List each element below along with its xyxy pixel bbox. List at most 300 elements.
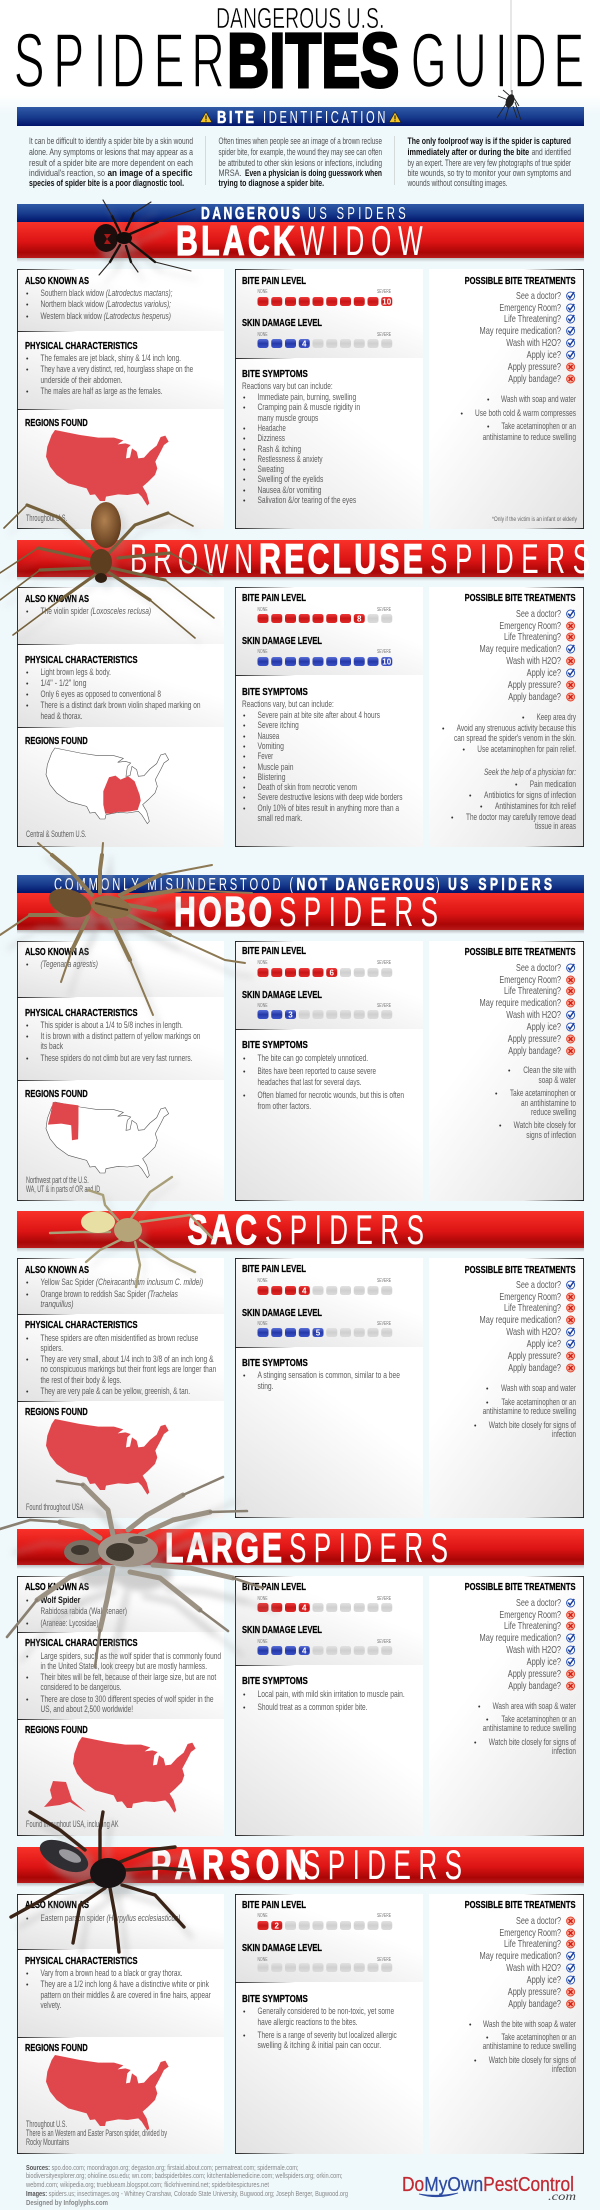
text block: intro column 3: wounds without consulting images.	[407, 178, 508, 188]
panel: large spiders levels and symptoms: BITE PAIN LEVEL	[242, 1581, 306, 1593]
panel: brown recluse levels and symptoms: Severe destructive lesions with deep wide borders	[258, 792, 403, 803]
panel: hobo levels and symptoms: NONE	[258, 1003, 268, 1009]
panel: sac identification: ALSO KNOWN AS	[25, 1264, 89, 1276]
panel: brown recluse levels and symptoms: •	[243, 806, 246, 813]
panel: brown recluse identification: 1/4" - 1/2" long	[40, 678, 86, 689]
panel: parson levels and symptoms: SKIN DAMAGE LEVEL	[242, 1942, 322, 1954]
panel: hobo treatments: soap & water	[538, 1075, 576, 1086]
panel: black widow identification: The females are jet black, shiny & 1/4 inch long.	[40, 353, 181, 364]
panel: hobo identification: It is brown with a distinct pattern of yellow markings on	[40, 1031, 200, 1042]
panel: parson treatments: See a doctor?	[516, 1915, 561, 1927]
panel: hobo treatments: Clean the site with	[523, 1065, 576, 1076]
panel: parson levels and symptoms: BITE PAIN LEVEL	[242, 1899, 306, 1911]
panel: black widow treatments: •	[487, 424, 490, 431]
panel: large spiders levels and symptoms: SKIN DAMAGE LEVEL	[242, 1624, 322, 1636]
panel: brown recluse levels and symptoms: Severe itching	[258, 720, 299, 731]
panel: black widow levels and symptoms: Immediate pain, burning, swelling	[258, 392, 356, 403]
panel: brown recluse treatments: tissue in areas	[535, 821, 576, 832]
panel: black widow identification	[17, 269, 224, 529]
band: hobo spiders: SPIDERS	[279, 889, 445, 936]
panel: sac identification: Found throughout USA	[26, 1502, 84, 1513]
panel: black widow treatments: Apply pressure?	[508, 361, 561, 373]
panel: sac treatments: Life Threatening?	[504, 1302, 561, 1314]
band: large spiders: LARGE	[165, 1524, 285, 1571]
panel: brown recluse identification: •	[26, 609, 29, 616]
panel: brown recluse treatments: Pain medication	[530, 779, 576, 790]
panel: brown recluse levels and symptoms: Fever	[258, 751, 273, 762]
panel: large spiders identification: •	[26, 1675, 29, 1682]
panel: parson levels and symptoms: swelling & itching & initial pain can occur.	[258, 2040, 381, 2051]
panel: black widow identification: PHYSICAL CHARACTERISTICS	[25, 340, 138, 352]
panel: sac treatments: •	[474, 1423, 477, 1430]
panel: hobo levels and symptoms: NONE	[258, 960, 268, 966]
panel: hobo levels and symptoms: •	[243, 1056, 246, 1063]
panel: sac levels and symptoms: SEVERE	[377, 1321, 391, 1327]
panel: parson identification: •	[26, 1916, 29, 1923]
footer: sources: Designed by Infoglyphs.com	[26, 2198, 108, 2207]
panel: sac levels and symptoms: NONE	[258, 1278, 268, 1284]
panel: black widow treatments: Apply bandage?	[508, 373, 561, 385]
panel: black widow levels and symptoms: Swelling of the eyelids	[258, 474, 323, 485]
panel: sac identification: •	[26, 1357, 29, 1364]
panel: brown recluse identification: Central & Southern U.S.	[26, 829, 86, 840]
panel: black widow treatments: Life Threatening?	[504, 313, 561, 325]
panel: brown recluse treatments: •	[469, 793, 472, 800]
panel: large spiders identification: Wolf Spider	[40, 1595, 81, 1605]
panel: parson levels and symptoms: BITE SYMPTOMS	[242, 1993, 308, 2005]
panel: large spiders treatments: •	[486, 1717, 489, 1724]
panel: black widow treatments: See a doctor?	[516, 290, 561, 302]
panel: large spiders treatments: Apply pressure?	[508, 1668, 561, 1680]
panel: large spiders identification: Rabidosa rabida (Walckenaer)	[40, 1606, 127, 1617]
panel: sac treatments: Apply pressure?	[508, 1350, 561, 1362]
panel: hobo treatments: •	[495, 1091, 498, 1098]
panel: parson levels and symptoms: 2	[275, 1922, 280, 1930]
panel: sac levels and symptoms: SKIN DAMAGE LEVEL	[242, 1307, 322, 1319]
panel: sac identification	[17, 1258, 224, 1518]
panel: black widow treatments: Wash with H2O?	[506, 337, 561, 349]
panel: black widow identification: The males are half as large as the females.	[40, 386, 162, 397]
panel: sac levels and symptoms: 5	[316, 1328, 321, 1338]
panel: sac levels and symptoms: BITE SYMPTOMS	[242, 1357, 308, 1369]
panel: large spiders levels and symptoms: NONE	[258, 1639, 268, 1645]
panel: hobo identification: REGIONS FOUND	[25, 1088, 88, 1100]
panel: brown recluse levels and symptoms: SEVERE	[377, 649, 391, 655]
panel: brown recluse identification: ALSO KNOWN AS	[25, 593, 89, 605]
panel: parson identification: They are a 1/2 inch long & have a distinctive white or pink	[40, 1979, 209, 1990]
band: hobo spiders: HOBO	[174, 888, 274, 935]
panel: black widow identification: •	[26, 314, 29, 321]
panel: hobo identification: Northwest part of the U.S.	[26, 1175, 89, 1186]
panel: sac identification: Yellow Sac Spider (Cheiracanthium inclusum C. mildei)	[40, 1277, 203, 1288]
panel: large spiders identification: •	[26, 1598, 29, 1605]
panel: black widow identification: underside of their abdomen.	[40, 375, 122, 386]
title: GUIDE	[411, 19, 584, 104]
panel: sac treatments: •	[486, 1386, 489, 1393]
panel: brown recluse levels and symptoms: BITE PAIN LEVEL	[242, 592, 306, 604]
panel: parson levels and symptoms: •	[243, 2009, 246, 2016]
panel: black widow levels and symptoms: NONE	[258, 289, 268, 295]
title: BITES	[227, 18, 399, 104]
panel: hobo treatments: See a doctor?	[516, 962, 561, 974]
panel: black widow levels and symptoms: SEVERE	[377, 289, 391, 295]
band: black widow	[17, 203, 584, 265]
panel: parson levels and symptoms: Generally considered to be non-toxic, yet some	[258, 2006, 394, 2017]
panel: sac levels and symptoms: BITE PAIN LEVEL	[242, 1263, 306, 1275]
panel: brown recluse identification: PHYSICAL CHARACTERISTICS	[25, 654, 138, 666]
panel: large spiders treatments: Apply ice?	[527, 1656, 561, 1668]
panel: black widow levels and symptoms: •	[243, 477, 246, 484]
panel: hobo levels and symptoms: The bite can go completely unnoticed.	[258, 1053, 368, 1064]
panel: large spiders identification: (Araneae: Lycosidae)	[40, 1618, 98, 1629]
panel: parson identification: Vary from a brown head to a black or gray thorax.	[40, 1968, 182, 1979]
panel: large spiders treatments: •	[478, 1704, 481, 1711]
panel: hobo levels and symptoms	[235, 941, 423, 1201]
panel: parson treatments: •	[469, 2022, 472, 2029]
panel: hobo treatments: signs of infection	[526, 1130, 576, 1141]
text block: intro column 2: be attributed to other skin lesions or infections, including	[218, 158, 382, 168]
panel: black widow levels and symptoms: 10	[382, 298, 392, 306]
panel: hobo identification: This spider is about a 1/4 to 5/8 inches in length.	[40, 1020, 183, 1031]
panel: black widow identification: •	[26, 356, 29, 363]
panel: large spiders treatments: Wash with H2O?	[506, 1644, 561, 1656]
panel: hobo treatments: Apply bandage?	[508, 1045, 561, 1057]
map: whole US	[46, 1419, 169, 1495]
panel: brown recluse levels and symptoms: Death of skin from necrotic venom	[258, 782, 357, 793]
map: northwest US	[46, 1102, 169, 1178]
icon: wolf spider	[0, 1477, 277, 1691]
panel: sac identification: Orange brown to reddish Sac Spider (Trachelas	[40, 1289, 178, 1300]
panel: black widow levels and symptoms: Reactions vary but can include:	[242, 381, 333, 392]
band: hobo spiders: NOT DANGEROUS	[296, 875, 437, 895]
panel: black widow levels and symptoms: •	[243, 395, 246, 402]
panel: brown recluse treatments: •	[515, 782, 518, 789]
text block: intro column 2: trying to diagnose a spider bite.	[218, 178, 324, 188]
panel: brown recluse identification: Light brown legs & body.	[40, 667, 111, 678]
panel: sac treatments: Apply bandage?	[508, 1362, 561, 1374]
panel: parson levels and symptoms: SEVERE	[377, 1913, 391, 1919]
panel: black widow levels and symptoms: Sweating	[258, 464, 284, 475]
panel: large spiders identification: US, and about 2,500 worldwide!	[40, 1704, 133, 1715]
text block: intro column 3: immediately after or during the bite	[408, 147, 529, 157]
panel: parson treatments: •	[474, 2058, 477, 2065]
panel: black widow treatments	[429, 269, 584, 529]
panel: sac treatments: Emergency Room?	[499, 1291, 561, 1303]
panel: brown recluse treatments: •	[522, 715, 525, 722]
panel: hobo treatments: an antihistamine to	[521, 1098, 576, 1109]
band: black widow: BLACK	[176, 217, 298, 264]
panel: parson identification: Throughout U.S.	[26, 2119, 67, 2130]
panel: brown recluse levels and symptoms: small red mark.	[258, 813, 302, 824]
panel: brown recluse treatments: •	[451, 815, 454, 822]
panel: hobo identification: PHYSICAL CHARACTERISTICS	[25, 1007, 138, 1019]
title	[14, 3, 584, 104]
panel: large spiders levels and symptoms	[235, 1576, 423, 1836]
panel: hobo levels and symptoms: 6	[330, 968, 335, 978]
panel: large spiders identification: in the United States, look creepy but are mostly harmless.	[40, 1661, 207, 1672]
panel: black widow levels and symptoms: SEVERE	[377, 332, 391, 338]
panel: large spiders levels and symptoms: Local pain, with mild skin irritation to muscle pain.	[258, 1689, 405, 1700]
icon: sac spider	[50, 1177, 217, 1292]
panel: parson levels and symptoms: •	[243, 2033, 246, 2040]
panel: black widow levels and symptoms: •	[243, 457, 246, 464]
panel: parson identification: Rocky Mountains	[26, 2137, 69, 2148]
panel: parson identification: ALSO KNOWN AS	[25, 1899, 89, 1911]
panel: black widow levels and symptoms: •	[243, 447, 246, 454]
map: whole US	[46, 430, 169, 506]
panel: hobo levels and symptoms: from other factors.	[258, 1101, 311, 1112]
panel: hobo levels and symptoms: Bites have been reported to cause severe	[258, 1066, 376, 1077]
panel: black widow levels and symptoms: •	[243, 426, 246, 433]
panel: black widow treatments: *Only if the victim is an infant or elderly	[492, 517, 577, 523]
panel: large spiders treatments: Life Threatening?	[504, 1620, 561, 1632]
icon: small hanging spider	[497, 0, 521, 120]
panel: sac treatments: May require medication?	[480, 1314, 561, 1326]
panel: hobo levels and symptoms: headaches that last for several days.	[258, 1077, 362, 1088]
panel: black widow levels and symptoms: Headache	[258, 423, 286, 434]
band: brown recluse: BROWN	[130, 536, 259, 583]
panel: large spiders identification: •	[26, 1697, 29, 1704]
panel: black widow levels and symptoms: •	[243, 436, 246, 443]
panel: brown recluse treatments: May require medication?	[480, 643, 561, 655]
panel: large spiders levels and symptoms: 4	[302, 1604, 307, 1612]
band: large spiders	[17, 1524, 584, 1572]
panel: hobo identification: These spiders do not climb but are very fast runners.	[40, 1053, 192, 1064]
icon: brown recluse spider	[0, 502, 220, 644]
panel: black widow identification: •	[26, 389, 29, 396]
panel: black widow identification: •	[26, 302, 29, 309]
panel: brown recluse levels and symptoms: •	[243, 795, 246, 802]
panel: black widow identification: Southern black widow (Latrodectus mactans);	[40, 288, 173, 299]
band: hobo spiders: )	[436, 874, 440, 895]
text block: intro column 2	[206, 136, 382, 188]
panel: brown recluse levels and symptoms: Nausea	[258, 731, 280, 742]
panel: black widow identification: Throughout U.S.	[26, 513, 67, 524]
panel: brown recluse levels and symptoms: BITE SYMPTOMS	[242, 686, 308, 698]
panel: black widow identification: •	[26, 291, 29, 298]
panel: parson levels and symptoms: There is a range of severity but localized allergic	[258, 2030, 397, 2041]
panel: large spiders levels and symptoms: Should treat as a common spider bite.	[258, 1702, 368, 1713]
band: black widow: DANGEROUS	[201, 204, 303, 224]
band: black widow: US SPIDERS	[308, 203, 409, 224]
panel: parson treatments: Life Threatening?	[504, 1938, 561, 1950]
panel: brown recluse identification: •	[26, 681, 29, 688]
panel: hobo treatments: Emergency Room?	[499, 974, 561, 986]
panel: black widow levels and symptoms	[235, 269, 423, 529]
panel: sac identification: They are very pale & can be yellow, greenish, & tan.	[40, 1386, 190, 1397]
panel: large spiders identification: •	[26, 1654, 29, 1661]
panel: hobo identification: its back	[40, 1041, 63, 1052]
title: DANGEROUS U.S.	[216, 3, 384, 35]
panel: hobo treatments: May require medication?	[480, 997, 561, 1009]
panel: large spiders levels and symptoms: •	[243, 1692, 246, 1699]
band: bite identification: BITE	[217, 108, 257, 128]
panel: sac treatments	[429, 1258, 584, 1518]
band: parson spiders	[17, 1841, 584, 1889]
panel: large spiders identification: PHYSICAL CHARACTERISTICS	[25, 1637, 138, 1649]
panel: brown recluse identification: •	[26, 670, 29, 677]
logo: DoMyOwnPestControl.com: .com	[548, 2189, 576, 2203]
text block: intro column 1: species of spider bite is a poor diagnostic tool.	[29, 178, 184, 188]
panel: black widow identification: •	[26, 367, 29, 374]
panel: black widow levels and symptoms: Nausea &/or vomiting	[258, 485, 322, 496]
panel: sac treatments: Apply ice?	[527, 1338, 561, 1350]
logo: DoMyOwnPestControl.com: DoMyOwnPestControl	[402, 2174, 574, 2196]
panel: hobo levels and symptoms: 3	[288, 1010, 293, 1020]
panel: black widow treatments: Emergency Room?	[499, 302, 561, 314]
panel: brown recluse levels and symptoms: •	[243, 785, 246, 792]
panel: sac identification: spiders.	[40, 1343, 63, 1354]
panel: parson identification: REGIONS FOUND	[25, 2042, 88, 2054]
panel: large spiders levels and symptoms: •	[243, 1705, 246, 1712]
panel: brown recluse levels and symptoms: •	[243, 754, 246, 761]
panel: black widow levels and symptoms: 4	[302, 340, 307, 348]
panel: brown recluse treatments: See a doctor?	[516, 608, 561, 620]
band: hobo spiders: COMMONLY MISUNDERSTOOD (	[54, 874, 296, 895]
panel: black widow levels and symptoms: •	[243, 405, 246, 412]
panel: large spiders treatments: Emergency Room?	[499, 1609, 561, 1621]
panel: parson treatments: Apply bandage?	[508, 1998, 561, 2010]
panel: brown recluse levels and symptoms: •	[243, 713, 246, 720]
panel: black widow treatments: •	[487, 397, 490, 404]
panel: parson identification: There is an Western and Easter Parson spider, divided by	[26, 2128, 167, 2139]
panel: hobo levels and symptoms: SEVERE	[377, 1003, 391, 1009]
panel: black widow levels and symptoms: Rash & itching	[258, 444, 301, 455]
panel: sac identification: These spiders are often misidentified as brown recluse	[40, 1333, 198, 1344]
panel: brown recluse treatments: •	[442, 726, 445, 733]
panel: black widow levels and symptoms: BITE SYMPTOMS	[242, 368, 308, 380]
panel: brown recluse levels and symptoms: 10	[382, 658, 392, 666]
panel: parson levels and symptoms	[235, 1894, 423, 2154]
panel: sac treatments: infection	[552, 1429, 576, 1440]
panel: brown recluse levels and symptoms: 8	[357, 614, 362, 624]
map: central and southern US	[46, 748, 169, 824]
text block: intro column 1: alone. Any symptoms or lesions that may appear as a	[29, 147, 193, 157]
footer: sources	[25, 2163, 348, 2207]
panel: black widow identification: REGIONS FOUND	[25, 417, 88, 429]
panel: brown recluse identification: The violin spider (Loxosceles reclusa)	[40, 606, 151, 617]
panel: hobo treatments: reduce swelling	[531, 1107, 576, 1118]
panel: large spiders identification: Found throughout USA, including AK	[26, 1819, 119, 1830]
panel: brown recluse levels and symptoms	[235, 587, 423, 847]
panel: sac levels and symptoms: A stinging sensation is common, similar to a bee	[258, 1370, 400, 1381]
panel: black widow treatments: May require medication?	[480, 325, 561, 337]
text block: intro column 2: MRSA.	[218, 168, 242, 178]
panel: hobo identification: WA, UT & in parts of OR and ID	[26, 1184, 100, 1195]
panel: hobo treatments	[429, 941, 584, 1201]
panel: parson treatments: •	[486, 2035, 489, 2042]
panel: brown recluse treatments: Apply ice?	[527, 667, 561, 679]
panel: sac treatments: •	[486, 1400, 489, 1407]
panel: brown recluse treatments: Life Threatening?	[504, 631, 561, 643]
panel: brown recluse treatments	[429, 587, 584, 847]
panel: black widow levels and symptoms: Dizziness	[258, 433, 285, 444]
panel: sac levels and symptoms: 4	[302, 1286, 307, 1296]
panel: sac identification: REGIONS FOUND	[25, 1406, 88, 1418]
panel: brown recluse treatments: Keep area dry	[537, 712, 576, 723]
panel: hobo identification	[17, 941, 224, 1201]
panel: large spiders identification: REGIONS FOUND	[25, 1724, 88, 1736]
panel: large spiders treatments: May require medication?	[480, 1632, 561, 1644]
panel: black widow treatments: Apply ice?	[527, 349, 561, 361]
panel: hobo identification: •	[26, 1034, 29, 1041]
panel: sac levels and symptoms	[235, 1258, 423, 1518]
text block: intro column 2: Often times when people see an image of a brown recluse	[218, 136, 382, 146]
panel: black widow levels and symptoms: Cramping pain & muscle rigidity in	[258, 402, 360, 413]
panel: parson treatments: Wash with H2O?	[506, 1962, 561, 1974]
panel: parson identification: PHYSICAL CHARACTERISTICS	[25, 1955, 138, 1967]
panel: black widow levels and symptoms: •	[243, 488, 246, 495]
panel: brown recluse levels and symptoms: SKIN DAMAGE LEVEL	[242, 635, 322, 647]
panel: large spiders treatments: infection	[552, 1746, 576, 1757]
band: hobo spiders: US SPIDERS	[448, 875, 555, 895]
panel: brown recluse treatments: Apply pressure?	[508, 679, 561, 691]
text block: intro column 2: Even a physician is doing guesswork when	[245, 168, 382, 178]
panel: hobo levels and symptoms: BITE PAIN LEVEL	[242, 945, 306, 957]
panel: hobo identification: •	[26, 1023, 29, 1030]
panel: parson levels and symptoms: have allergic reactions to the bites.	[258, 2017, 358, 2028]
band: bite identification	[17, 107, 584, 128]
panel: brown recluse treatments: Wash with H2O?	[506, 655, 561, 667]
panel: brown recluse identification: Only 6 eyes as opposed to conventional 8	[40, 689, 161, 700]
panel: brown recluse treatments: •	[480, 804, 483, 811]
panel: black widow identification: ALSO KNOWN AS	[25, 275, 89, 287]
panel: brown recluse levels and symptoms: •	[243, 775, 246, 782]
panel: brown recluse levels and symptoms: •	[243, 765, 246, 772]
band: large spiders: SPIDERS	[289, 1525, 455, 1572]
text block: intro column 1	[29, 136, 193, 188]
panel: large spiders levels and symptoms: SEVERE	[377, 1639, 391, 1645]
icon: hobo spider	[0, 843, 260, 1029]
panel: hobo identification: •	[26, 962, 29, 969]
panel: brown recluse levels and symptoms: SEVERE	[377, 607, 391, 613]
text block: intro column 3: and identified	[532, 147, 571, 157]
panel: hobo levels and symptoms: BITE SYMPTOMS	[242, 1039, 308, 1051]
panel: parson levels and symptoms: NONE	[258, 1913, 268, 1919]
panel: brown recluse levels and symptoms: NONE	[258, 649, 268, 655]
panel: parson levels and symptoms: SEVERE	[377, 1957, 391, 1963]
panel: large spiders identification: Their bites will be felt, because of their large size, but are not	[40, 1672, 216, 1683]
text block: intro column 1: It can be difficult to identify a spider bite by a skin wound	[29, 136, 193, 146]
panel: parson identification: pattern on their middles & are covered in fine hairs, appear	[40, 1990, 211, 2001]
panel: brown recluse levels and symptoms: Severe pain at bite site after about 4 hours	[258, 710, 380, 721]
band: brown recluse	[17, 535, 598, 583]
panel: black widow levels and symptoms: Restlessness & anxiety	[258, 454, 323, 465]
panel: hobo treatments: •	[508, 1068, 511, 1075]
panel: black widow levels and symptoms: Salivation &/or tearing of the eyes	[258, 495, 356, 506]
panel: hobo treatments: Life Threatening?	[504, 985, 561, 997]
panel: brown recluse treatments: Emergency Room?	[499, 620, 561, 632]
icon: parson spider	[11, 1812, 196, 1962]
panel: sac levels and symptoms: NONE	[258, 1321, 268, 1327]
panel: brown recluse identification	[17, 587, 224, 847]
footer: sources: biodiversityexplorer.org; ohioline.osu.edu; wn.com; badspiderbites.com; kitchentablemedicine.com; wellspiders.org; orkin.com;	[26, 2171, 342, 2180]
panel: hobo identification: (Tegenaria agrestis)	[40, 959, 98, 970]
panel: black widow levels and symptoms: BITE PAIN LEVEL	[242, 275, 306, 287]
panel: parson levels and symptoms: NONE	[258, 1957, 268, 1963]
panel: large spiders identification: considered to be dangerous.	[40, 1682, 122, 1693]
panel: sac levels and symptoms: sting.	[258, 1381, 274, 1392]
map: US including Alaska	[44, 1737, 196, 1813]
panel: sac identification: the rest of their body & legs.	[40, 1375, 122, 1386]
panel: parson treatments: infection	[552, 2064, 576, 2075]
panel: parson identification: velvety.	[40, 2000, 61, 2011]
map: whole US	[46, 2055, 169, 2131]
panel: large spiders identification: There are close to 300 different species of wolf spider in the	[40, 1694, 214, 1705]
panel: large spiders treatments: Apply bandage?	[508, 1680, 561, 1692]
panel: black widow treatments: •	[460, 411, 464, 418]
panel: parson identification: Eastern parson spider (Herpyllus ecclesiasticus)	[40, 1913, 180, 1924]
